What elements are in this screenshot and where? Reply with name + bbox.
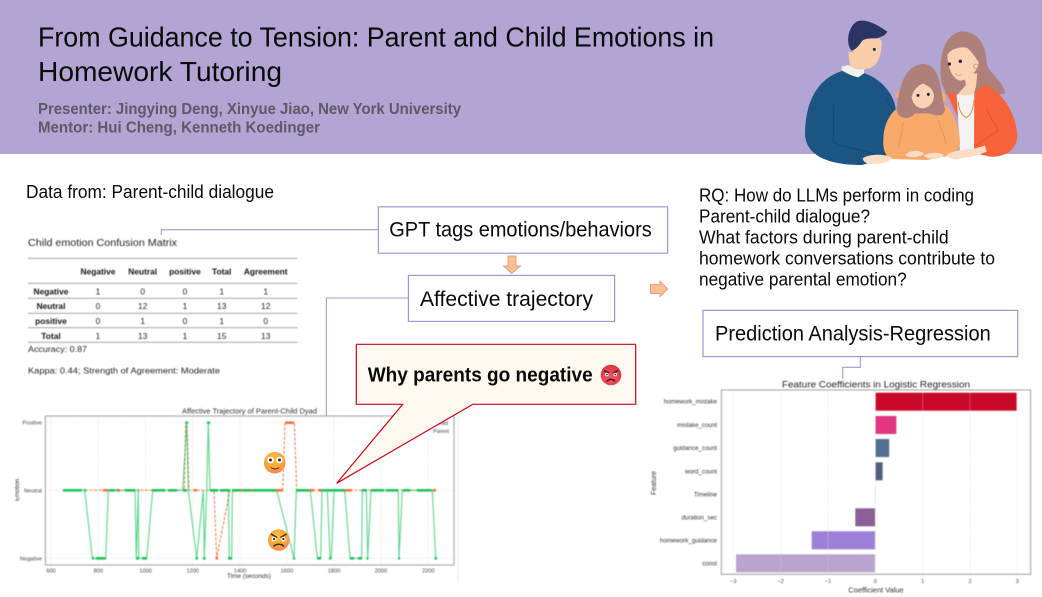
title [38,22,714,87]
title: Homework Tutoring [38,56,282,87]
box: affective trajectory [408,275,615,321]
table: child emotion confusion matrix: 1 [183,331,188,341]
text: research questions: What factors during parent-child [699,228,949,248]
value axis labels: 2 [968,579,972,585]
feature labels: word_count [684,468,717,475]
arrow: down [504,256,520,274]
text: research questions: homework conversations contribute to [699,248,995,268]
table: child emotion confusion matrix: 12 [261,301,271,311]
table: child emotion confusion matrix: 13 [217,301,227,311]
legend: Child [436,421,448,427]
icon: flushed face [264,452,286,474]
table: child emotion confusion matrix: 12 [138,301,148,311]
table: child emotion confusion matrix: 13 [138,331,148,341]
feature labels: mistake_count [677,422,717,429]
chart: logistic regression coefficients [651,379,1031,594]
y axis labels: Emotion [15,479,21,501]
x axis labels: 1600 [281,569,293,575]
y axis labels: Neutral [24,488,42,494]
table: child emotion confusion matrix: Kappa: 0.44; Strength of Agreement: Moderate [28,365,220,375]
table: child emotion confusion matrix: 1 [96,286,101,296]
parent series [85,423,436,558]
feature labels: homework_mistake [664,399,718,406]
text: research questions: RQ: How do LLMs perform in coding [699,186,974,206]
value axis labels: 3 [1016,579,1019,585]
chart title: Feature Coefficients in Logistic Regression [782,379,970,389]
icon: family illustration [805,21,1017,165]
table: child emotion confusion matrix: 1 [140,316,145,326]
arrow: right [650,281,668,296]
box: GPT tags [378,207,668,253]
icon: angry face [268,529,290,551]
x axis labels: 800 [94,569,103,575]
table: child emotion confusion matrix: Child emotion Confusion Matrix [28,238,177,249]
value axis labels: Coefficient Value [848,586,904,594]
table: child emotion confusion matrix: Total [41,331,61,341]
connector: trajectory box to chart [326,298,408,416]
plot frame and grid [721,390,1031,574]
table: child emotion confusion matrix: 1 [219,316,224,326]
table: child emotion confusion matrix: 0 [183,316,188,326]
text: research questions: negative parental emotion? [699,270,907,290]
presenters and mentors: Mentor: Hui Cheng, Kenneth Koedinger [38,120,320,137]
table: child emotion confusion matrix: 15 [217,331,227,341]
table: child emotion confusion matrix: Accuracy: 0.87 [28,344,87,354]
table: child emotion confusion matrix: positive [169,267,201,277]
chart: affective trajectory line chart [15,400,459,583]
feature labels: duration_sec [682,514,717,521]
x axis labels: 600 [46,569,56,575]
feature labels: const [702,560,717,567]
x axis labels: 1000 [139,569,152,575]
header band [0,0,1042,154]
presenters and mentors [38,101,461,137]
value axis labels: 1 [921,579,924,585]
table: child emotion confusion matrix: 13 [261,331,271,341]
text: data source: Data from: Parent-child dialogue [26,182,274,202]
y axis labels [15,421,42,562]
connector: GPT box to confusion matrix [161,230,378,235]
value axis labels: −3 [730,579,736,585]
callout: why parents go negative: Why parents go negative [368,365,593,387]
table: child emotion confusion matrix: 0 [96,301,101,311]
box: GPT tags: GPT tags emotions/behaviors [389,219,652,242]
x axis labels: 1200 [186,569,199,575]
table: child emotion confusion matrix: positive [35,316,67,326]
feature labels [651,399,718,567]
table: child emotion confusion matrix: Negative [34,286,69,296]
table: child emotion confusion matrix: Negative [81,267,116,277]
x axis labels: 2200 [422,569,435,575]
bars [736,392,1017,573]
legend: Parent [433,429,449,435]
text: research questions [699,186,995,290]
table: child emotion confusion matrix: 1 [263,286,268,296]
feature labels: homework_guidance [660,537,718,544]
chart title: Affective Trajectory of Parent-Child Dyad [182,406,317,415]
value axis labels: 0 [874,579,877,585]
connector: prediction box to bar chart [843,357,860,379]
x axis labels [46,569,435,580]
child series [63,423,437,558]
table: child emotion confusion matrix: Agreement [244,267,288,277]
feature labels: guidance_count [673,445,717,452]
box: prediction analysis [703,310,1018,357]
x axis labels: 1400 [234,569,246,575]
feature labels: Feature [651,471,658,495]
table: child emotion confusion matrix: 1 [183,301,188,311]
table: child emotion confusion matrix: Neutral [37,301,65,311]
table: child emotion confusion matrix: 1 [96,331,101,341]
icon: angry face in callout [601,365,621,385]
callout: why parents go negative [337,344,636,483]
value axis labels: −2 [778,579,784,585]
value axis labels [730,579,1019,594]
table: child emotion confusion matrix: Neutral [128,267,157,277]
table: child emotion confusion matrix: 0 [263,316,268,326]
y axis labels: Negative [20,556,42,562]
legend [424,417,452,436]
text: research questions: Parent-child dialogue? [699,207,870,227]
presenters and mentors: Presenter: Jingying Deng, Xinyue Jiao, New York University [38,101,461,118]
table: child emotion confusion matrix [28,238,298,375]
table: child emotion confusion matrix: 0 [140,286,145,296]
feature labels: Timeline [694,491,718,498]
plot frame and grid [45,416,454,565]
x axis labels: 2000 [375,569,387,575]
box: affective trajectory: Affective trajectory [420,288,593,311]
x axis labels: Time (seconds) [227,573,271,580]
table: child emotion confusion matrix: Total [212,267,231,277]
y axis labels: Positive [22,421,42,427]
table: child emotion confusion matrix: 0 [96,316,101,326]
value axis labels: −1 [825,579,831,585]
x axis labels: 1800 [328,569,340,575]
table: child emotion confusion matrix: 1 [219,286,224,296]
box: prediction analysis: Prediction Analysis-Regression [715,323,991,346]
title: From Guidance to Tension: Parent and Child Emotions in [38,22,714,53]
table: child emotion confusion matrix: 0 [183,286,188,296]
